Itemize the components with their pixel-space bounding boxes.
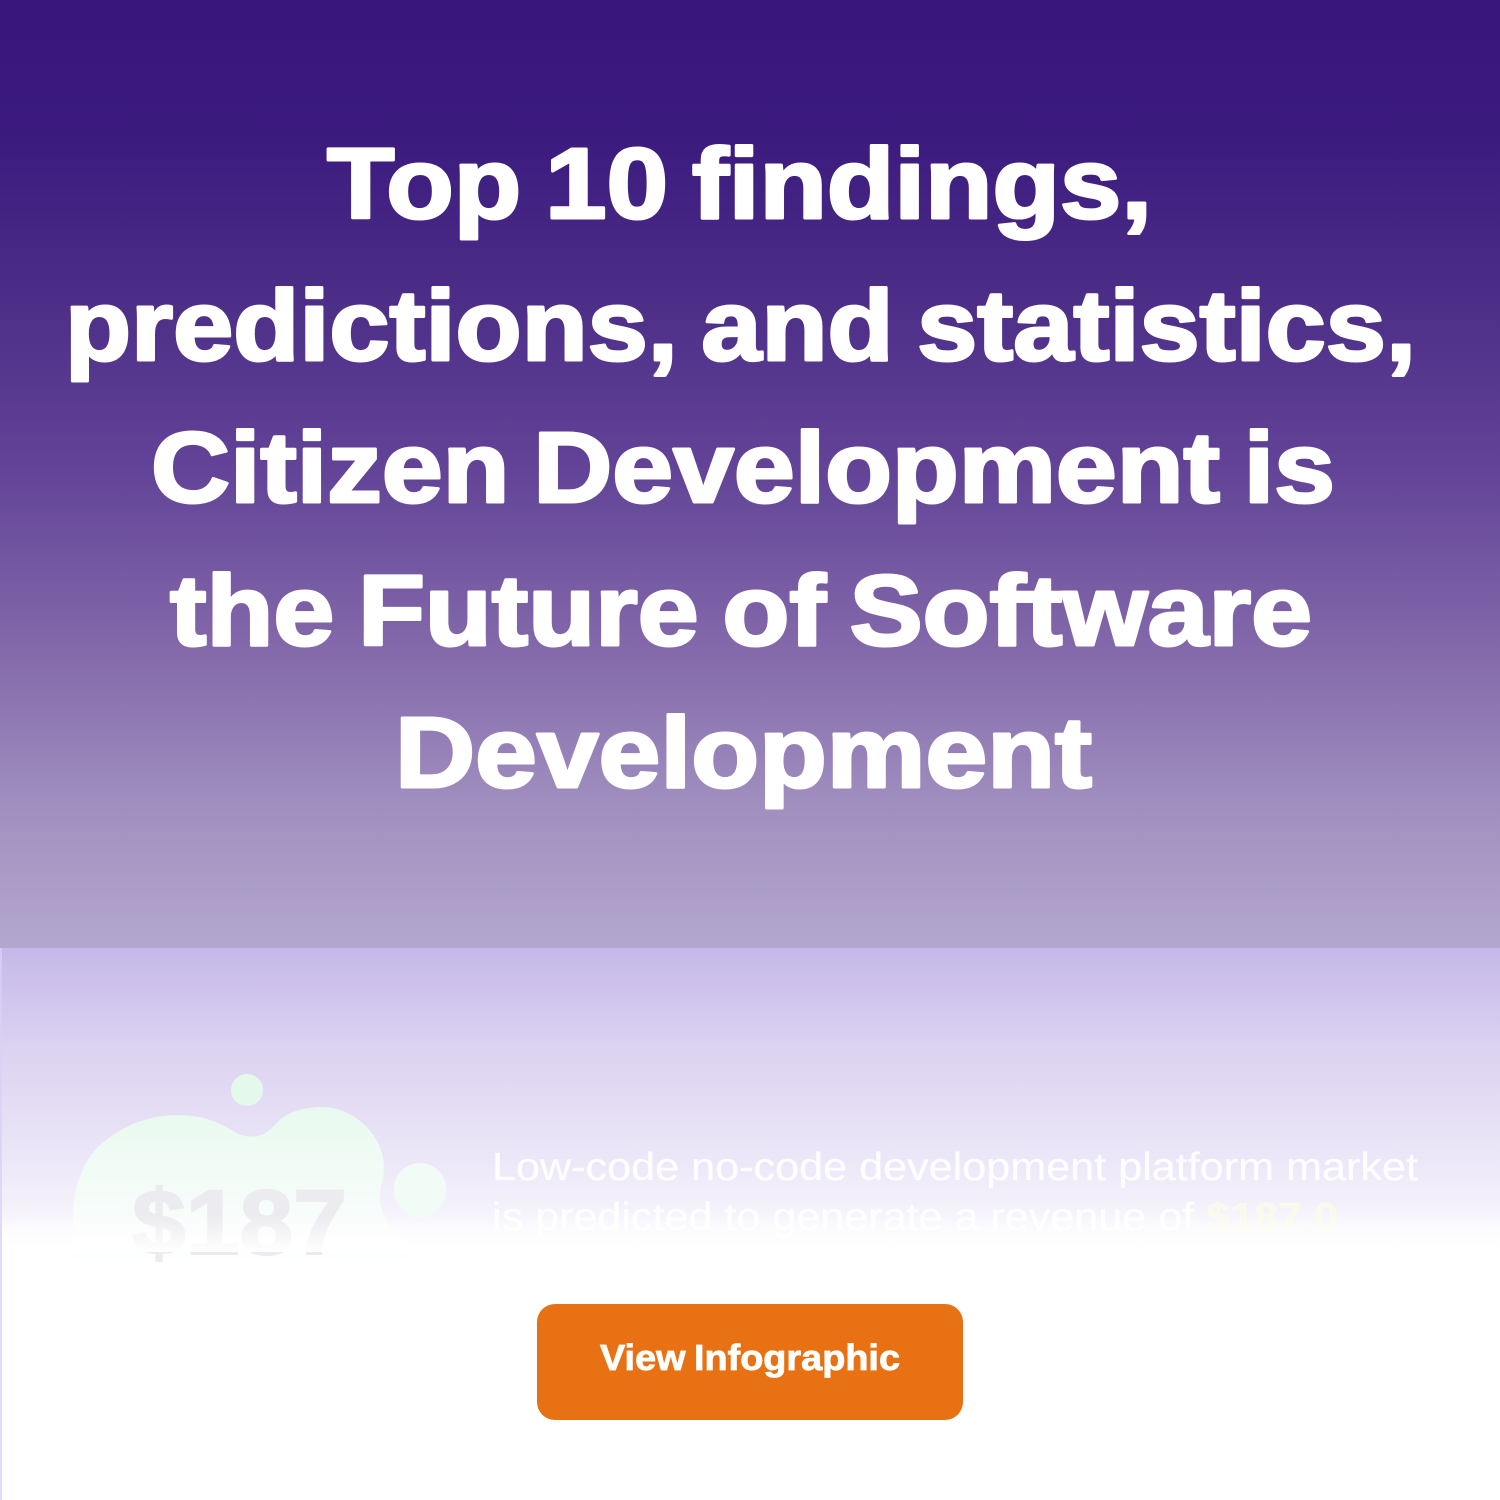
button: view infographic xyxy=(537,1304,963,1420)
panel: faded lavender preview xyxy=(0,948,1500,1500)
title: the Future of Software xyxy=(170,555,1312,667)
blob value: $187 xyxy=(132,1172,347,1274)
text block: market prediction: Low-code no-code development platform market xyxy=(492,1146,1418,1189)
button label: View Infographic xyxy=(600,1337,900,1378)
title: Citizen Development is xyxy=(151,412,1335,524)
icon: green blob with $187 xyxy=(73,1074,446,1274)
text block: market prediction xyxy=(492,1146,1418,1239)
text block: market prediction: is predicted to generate a revenue of $187.0 xyxy=(492,1196,1338,1239)
panel: purple header gradient xyxy=(0,0,1500,948)
white fade overlay xyxy=(2,1215,1500,1252)
title xyxy=(65,128,1416,809)
title: Development xyxy=(395,697,1092,809)
title: Top 10 findings, xyxy=(327,128,1152,240)
title: predictions, and statistics, xyxy=(65,270,1416,382)
